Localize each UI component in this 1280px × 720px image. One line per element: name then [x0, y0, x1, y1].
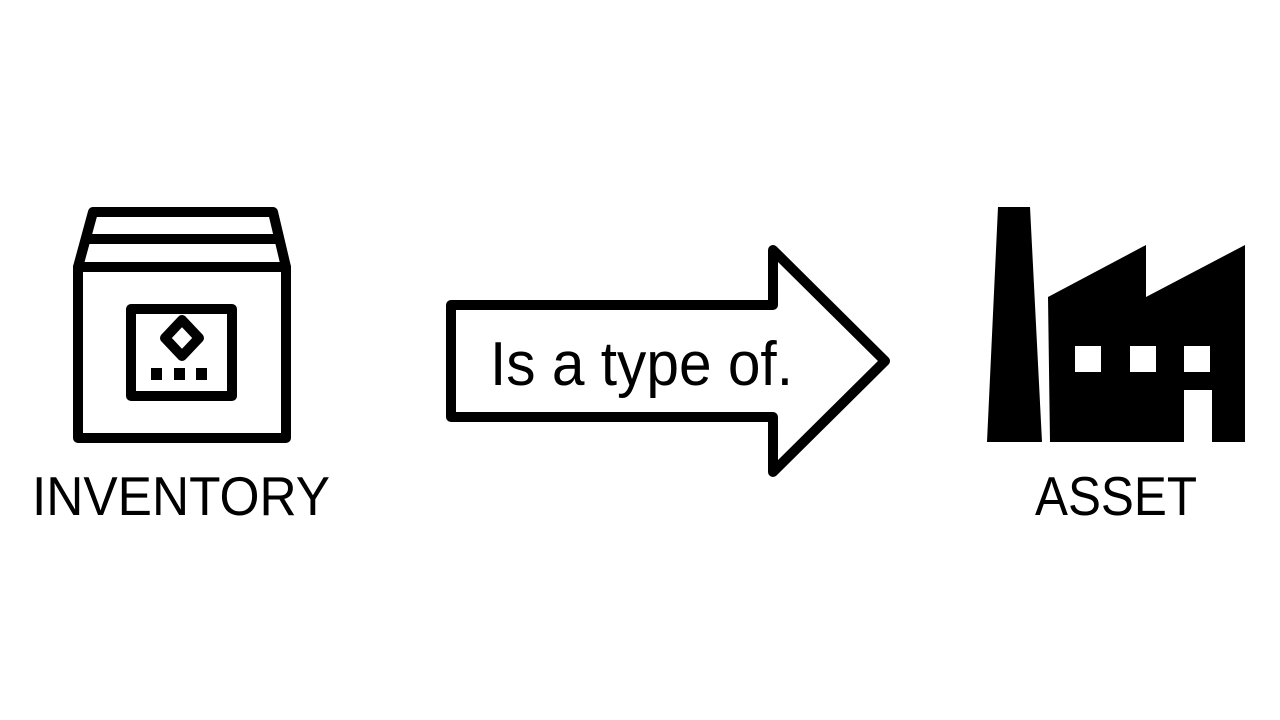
arrow text: Is a type of.: [490, 330, 793, 399]
arrow: is a type of: [451, 250, 885, 472]
label: asset: ASSET: [1035, 465, 1197, 527]
icon: inventory box: [78, 212, 286, 438]
icon: factory: [987, 207, 1245, 442]
label: inventory: INVENTORY: [32, 465, 330, 527]
